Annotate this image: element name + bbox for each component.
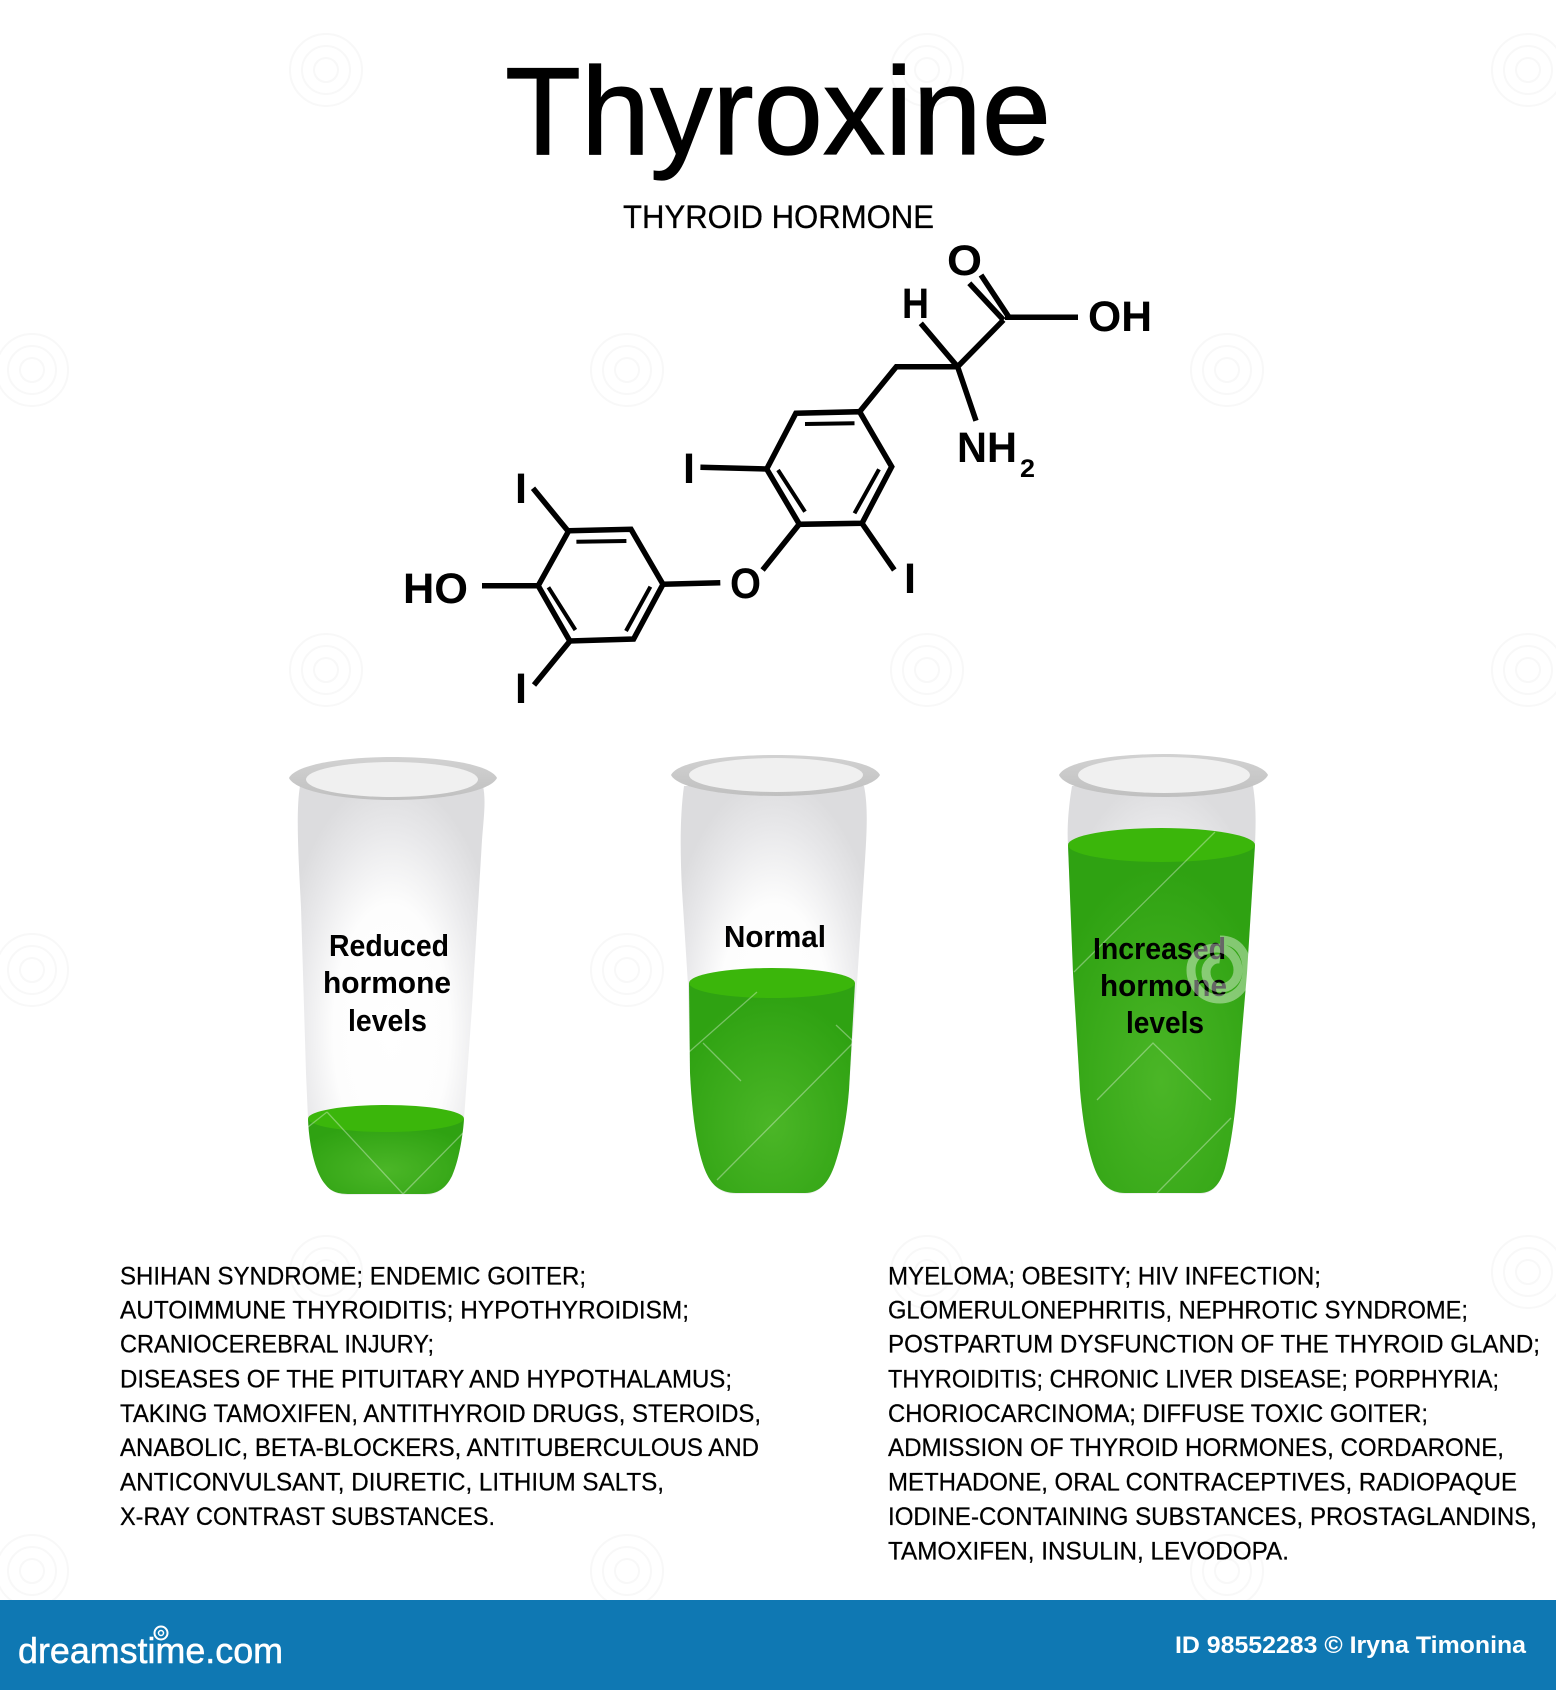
label: reduced hormone levels: hormone bbox=[323, 965, 451, 1000]
chemical structure: thyroxine molecule bbox=[403, 237, 1152, 713]
footer band bbox=[0, 1600, 1556, 1690]
watermark spiral on tube bbox=[1191, 940, 1247, 999]
label: increased hormone levels: Increased bbox=[1093, 931, 1226, 966]
green liquid: low bbox=[308, 1105, 464, 1194]
label: increased hormone levels: levels bbox=[1126, 1005, 1204, 1040]
text block: causes of increased hormone levels: MYELOMA; OBESITY; HIV INFECTION; bbox=[888, 1262, 1321, 1290]
atom labels: O bbox=[947, 237, 982, 285]
atom labels: I bbox=[515, 665, 527, 713]
text block: causes of reduced hormone levels: TAKING TAMOXIFEN, ANTITHYROID DRUGS, STEROIDS, bbox=[120, 1400, 761, 1428]
text block: causes of reduced hormone levels: AUTOIMMUNE THYROIDITIS; HYPOTHYROIDISM; bbox=[120, 1296, 689, 1324]
text block: causes of increased hormone levels: IODINE-CONTAINING SUBSTANCES, PROSTAGLANDINS, bbox=[888, 1503, 1537, 1531]
left aromatic ring bbox=[538, 529, 663, 641]
test tube: increased hormone levels bbox=[1059, 754, 1268, 1194]
tube rim bbox=[1059, 754, 1268, 797]
footer logo: dreamstime.com: dreamstime.com bbox=[18, 1630, 283, 1671]
green liquid: normal bbox=[689, 968, 855, 1193]
tube rim bbox=[289, 757, 497, 800]
label: increased hormone levels: hormone bbox=[1100, 968, 1227, 1003]
text block: causes of increased hormone levels: TAMOXIFEN, INSULIN, LEVODOPA. bbox=[888, 1537, 1289, 1565]
tube rim bbox=[671, 755, 880, 796]
tube glass body bbox=[1068, 786, 1256, 1194]
text block: causes of increased hormone levels: ADMISSION OF THYROID HORMONES, CORDARONE, bbox=[888, 1434, 1504, 1462]
atom labels: NH bbox=[957, 424, 1017, 472]
label: reduced hormone levels: levels bbox=[348, 1003, 427, 1038]
atom labels: I bbox=[683, 445, 695, 493]
label: increased hormone levels bbox=[1093, 931, 1227, 1040]
footer image id and credit: ID 98552283 © Iryna Timonina bbox=[1175, 1632, 1527, 1659]
atom labels: O bbox=[730, 560, 761, 608]
title: Thyroxine bbox=[505, 43, 1051, 181]
text block: causes of reduced hormone levels: SHIHAN SYNDROME; ENDEMIC GOITER; bbox=[120, 1262, 586, 1290]
tube glass body bbox=[681, 786, 867, 1194]
text block: causes of reduced hormone levels: X-RAY CONTRAST SUBSTANCES. bbox=[120, 1503, 495, 1531]
text block: causes of reduced hormone levels bbox=[120, 1262, 761, 1531]
atom labels: I bbox=[515, 465, 527, 513]
test tube: normal bbox=[671, 755, 880, 1194]
text block: causes of increased hormone levels bbox=[888, 1262, 1540, 1565]
atom labels: I bbox=[904, 555, 916, 603]
green liquid: high bbox=[1068, 828, 1255, 1193]
text block: causes of reduced hormone levels: ANABOLIC, BETA-BLOCKERS, ANTITUBERCULOUS AND bbox=[120, 1434, 759, 1462]
atom labels: HO bbox=[403, 565, 468, 613]
text block: causes of increased hormone levels: CHORIOCARCINOMA; DIFFUSE TOXIC GOITER; bbox=[888, 1400, 1428, 1428]
text block: causes of increased hormone levels: POSTPARTUM DYSFUNCTION OF THE THYROID GLAND; bbox=[888, 1331, 1540, 1359]
text block: causes of reduced hormone levels: ANTICONVULSANT, DIURETIC, LITHIUM SALTS, bbox=[120, 1469, 664, 1497]
atom labels: OH bbox=[1088, 293, 1152, 341]
text block: causes of increased hormone levels: THYROIDITIS; CHRONIC LIVER DISEASE; PORPHYRIA; bbox=[888, 1365, 1499, 1393]
text block: causes of reduced hormone levels: CRANIOCEREBRAL INJURY; bbox=[120, 1331, 434, 1359]
molecule bonds bbox=[482, 275, 1078, 685]
atom labels: H bbox=[902, 280, 929, 328]
test tube: reduced hormone levels bbox=[289, 757, 497, 1195]
label: normal: Normal bbox=[724, 919, 826, 954]
tube glass body bbox=[298, 786, 485, 1195]
atom labels bbox=[403, 237, 1152, 713]
atom labels: 2 bbox=[1020, 455, 1035, 483]
text block: causes of reduced hormone levels: DISEASES OF THE PITUITARY AND HYPOTHALAMUS; bbox=[120, 1365, 732, 1393]
label: reduced hormone levels bbox=[323, 928, 451, 1038]
subtitle: THYROID HORMONE bbox=[623, 199, 934, 235]
right aromatic ring bbox=[767, 412, 892, 524]
text block: causes of increased hormone levels: METHADONE, ORAL CONTRACEPTIVES, RADIOPAQUE bbox=[888, 1469, 1517, 1497]
text block: causes of increased hormone levels: GLOMERULONEPHRITIS, NEPHROTIC SYNDROME; bbox=[888, 1296, 1468, 1324]
label: reduced hormone levels: Reduced bbox=[329, 928, 449, 963]
